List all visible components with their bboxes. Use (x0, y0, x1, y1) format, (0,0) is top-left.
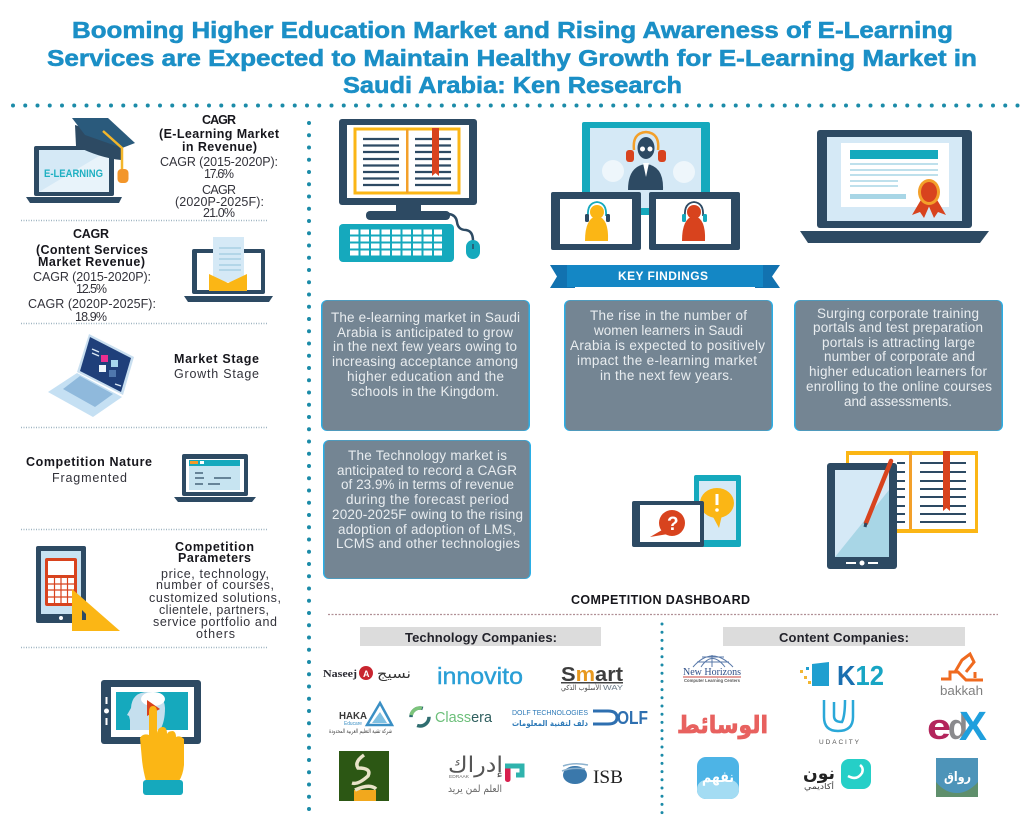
panel: finding 2: Arabia is expected to positively (570, 338, 765, 353)
logo: K12: K12 (837, 660, 884, 691)
text: e-learning CAGR: CAGR (202, 113, 236, 127)
text: competition nature: Competition Nature (26, 455, 152, 469)
text: content services CAGR: CAGR (73, 227, 109, 241)
logo: New Horizons: Computer Learning Centers (684, 678, 740, 683)
panel: finding 4: anticipated to record a CAGR (337, 463, 517, 478)
text: market stage (174, 352, 259, 381)
logo: Haka Educare (329, 703, 392, 735)
title: Booming Higher Education Market and Rising Awareness of E-Learning (72, 17, 953, 43)
text: competition parameters (149, 540, 281, 641)
panel: finding 2: women learners in Saudi (593, 323, 743, 338)
logo: Classera: Classera (435, 709, 493, 726)
panel: finding 2: impact the e-learning market (577, 353, 757, 368)
text: competition parameters: Competition (175, 540, 254, 554)
panel: finding 2 (564, 300, 773, 431)
logo: bakkah: bakkah (940, 683, 983, 698)
logo: Udacity: UDACITY (819, 739, 860, 746)
panel: finding 3: and assessments. (844, 394, 952, 409)
panel: finding 2: The rise in the number of (590, 308, 747, 323)
logo: Haka Educare: شركة تقنية التعليم العربية المحدودة (329, 728, 392, 735)
panel: finding 4 (323, 440, 531, 579)
heading: competition dashboard: COMPETITION DASHBOARD (571, 593, 750, 607)
text: content services CAGR: CAGR (2020P-2025F): (28, 297, 156, 311)
text: content services CAGR: (Content Services (36, 243, 148, 257)
logo: edX: e (927, 706, 951, 747)
icon: question and exclamation devices (632, 475, 741, 547)
logo: Naseej: A (363, 669, 370, 679)
panel: finding 3: higher education learners for (809, 364, 988, 379)
logo: Naseej (323, 666, 411, 682)
logo: New Horizons (683, 655, 741, 683)
panel: finding 1 (321, 300, 530, 431)
text: competition parameters: others (196, 627, 235, 641)
text: market stage: Market Stage (174, 352, 259, 366)
icon: laptop with certificate (800, 130, 989, 243)
logo: Noon Academy (803, 759, 871, 791)
panel: finding 1: increasing acceptance among (332, 354, 518, 369)
logo: Edraak (448, 753, 522, 795)
text: e-learning CAGR: in Revenue) (182, 140, 257, 154)
logo: Haka Educare: Educare (344, 721, 362, 727)
panel: technology companies (323, 627, 648, 801)
title (47, 17, 977, 98)
icon: open laptop, market stage (48, 334, 134, 417)
logo: green square (339, 751, 389, 801)
logo: Edraak: EDRAAK (449, 774, 469, 779)
logo: Noon Academy: نون (803, 764, 835, 784)
panel: finding 2: in the next few years. (600, 368, 733, 383)
logo: edX (927, 703, 987, 749)
text: competition parameters: customized solutions, (149, 591, 281, 605)
text: competition parameters: clientele, partners, (159, 603, 269, 617)
icon: video conference with tablets (551, 122, 740, 250)
icon: tablet with finger tap (101, 680, 201, 795)
icon: e-learning laptop with graduation cap: E-LEARNING (44, 168, 103, 180)
panel: finding 4: of 23.9% in terms of revenue (341, 477, 514, 492)
heading: content companies (723, 627, 965, 646)
panel: finding 3: number of corporate and (824, 349, 975, 364)
panel: finding 3: enrolling to the online courses (806, 379, 992, 394)
panel: finding 1: The e-learning market in Saudi (331, 310, 520, 325)
panel: content companies (677, 627, 987, 799)
text: competition nature: Fragmented (52, 471, 127, 485)
panel: finding 1: schools in the Kingdom. (351, 384, 499, 399)
title: Services are Expected to Maintain Healthy Growth for E-Learning Market in (47, 45, 977, 71)
icon: question and exclamation devices: ? (667, 514, 679, 535)
text: content services CAGR: CAGR (2015-2020P): (33, 270, 151, 284)
panel: finding 4: during the forecast period (346, 492, 509, 507)
panel: left column market stats (26, 113, 281, 795)
text: e-learning CAGR: (E-Learning Market (159, 127, 280, 141)
logo: Smart Way: WAY (603, 685, 623, 692)
text: competition nature (26, 455, 152, 485)
text: content services CAGR: 12.5% (76, 282, 107, 296)
logo: Naseej: نسيج (377, 667, 411, 682)
logo: Smart Way: الأسلوب الذكي (561, 683, 601, 692)
text: market stage: Growth Stage (174, 367, 259, 381)
panel: finding 3: portals is attracting large (822, 335, 975, 350)
logo: Dolf Technologies (512, 708, 648, 728)
text: e-learning CAGR (159, 113, 280, 220)
logo: bakkah (940, 654, 983, 698)
logo: Haka Educare: HAKA (339, 711, 367, 722)
text: e-learning CAGR: 17.6% (204, 167, 234, 181)
banner: key findings (550, 265, 780, 288)
text: e-learning CAGR: CAGR (202, 183, 236, 197)
logo: Rewaq (936, 758, 978, 797)
heading: technology companies: Technology Companies: (405, 630, 557, 645)
text: competition parameters: service portfolio and (153, 615, 277, 629)
logo: Rewaq: رواق (944, 770, 971, 785)
icon: calculator tablet and set square (36, 546, 120, 631)
panel: finding 3: Surging corporate training (817, 306, 979, 321)
logo: Fahem (697, 757, 739, 799)
panel: finding 3 (794, 300, 1003, 431)
logo: Classera (411, 708, 493, 726)
logo: Udacity (819, 700, 860, 746)
logo: K12 (800, 660, 884, 691)
text: content services CAGR: Market Revenue) (38, 255, 145, 269)
icon: desktop computer with open book (339, 119, 480, 262)
panel: finding 4: The Technology market is (348, 448, 507, 463)
text: content services CAGR (28, 227, 156, 324)
text: e-learning CAGR: (2020P-2025F): (175, 195, 264, 209)
logo: Edraak: إدراك (448, 753, 503, 778)
text: competition parameters: Parameters (178, 551, 251, 565)
heading: content companies: Content Companies: (779, 630, 909, 645)
logo: innovito: innovito (437, 663, 523, 689)
panel: finding 4: adoption of adoption of LMS, (338, 522, 516, 537)
icon: laptop with dashboard (174, 454, 256, 502)
logo: Naseej: Naseej (323, 668, 357, 680)
icon: e-learning laptop with graduation cap (26, 118, 135, 203)
logo: ISB (562, 764, 623, 788)
panel: finding 4: 2020-2025F owing to the rising (332, 507, 523, 522)
icon: laptop with envelope (184, 237, 273, 302)
text: competition parameters: number of courses, (156, 578, 274, 592)
logo: Dolf Technologies: DOLF TECHNOLOGIES (512, 708, 588, 717)
logo: Noon Academy: أكاديمي (804, 781, 834, 791)
logo: ISB: ISB (593, 767, 623, 788)
panel: finding 4: LCMS and other technologies (336, 536, 520, 551)
logo: edX: X (959, 703, 987, 749)
logo: Dolf Technologies: دلف لتقنية المعلومات (512, 719, 588, 728)
heading: technology companies (360, 627, 601, 646)
title: Saudi Arabia: Ken Research (343, 72, 682, 98)
logo: New Horizons: New Horizons (683, 667, 741, 678)
logo: Dolf Technologies: OLF (617, 708, 648, 728)
icon: tablet, pen and book (827, 451, 978, 569)
text: content services CAGR: 18.9% (75, 310, 107, 324)
text: e-learning CAGR: 21.0% (203, 206, 235, 220)
panel: finding 1: in the next few years owing to (333, 339, 517, 354)
panel: finding 3: portals and test preparation (813, 320, 983, 335)
panel: finding 1: Arabia is anticipated to grow (337, 325, 513, 340)
logo: Al Wasaet: الوسائط (677, 711, 768, 739)
panel: finding 1: higher education and the (347, 369, 504, 384)
banner: key findings: KEY FINDINGS (618, 269, 708, 283)
logo: Fahem: نفهم (702, 768, 734, 786)
logo: Edraak: العلم لمن يريد (448, 784, 502, 795)
text: competition parameters: price, technology, (161, 567, 269, 581)
logo: edX: d (948, 706, 968, 747)
logo: Smart Way: Smart (561, 664, 623, 686)
text: e-learning CAGR: CAGR (2015-2020P): (160, 155, 278, 169)
